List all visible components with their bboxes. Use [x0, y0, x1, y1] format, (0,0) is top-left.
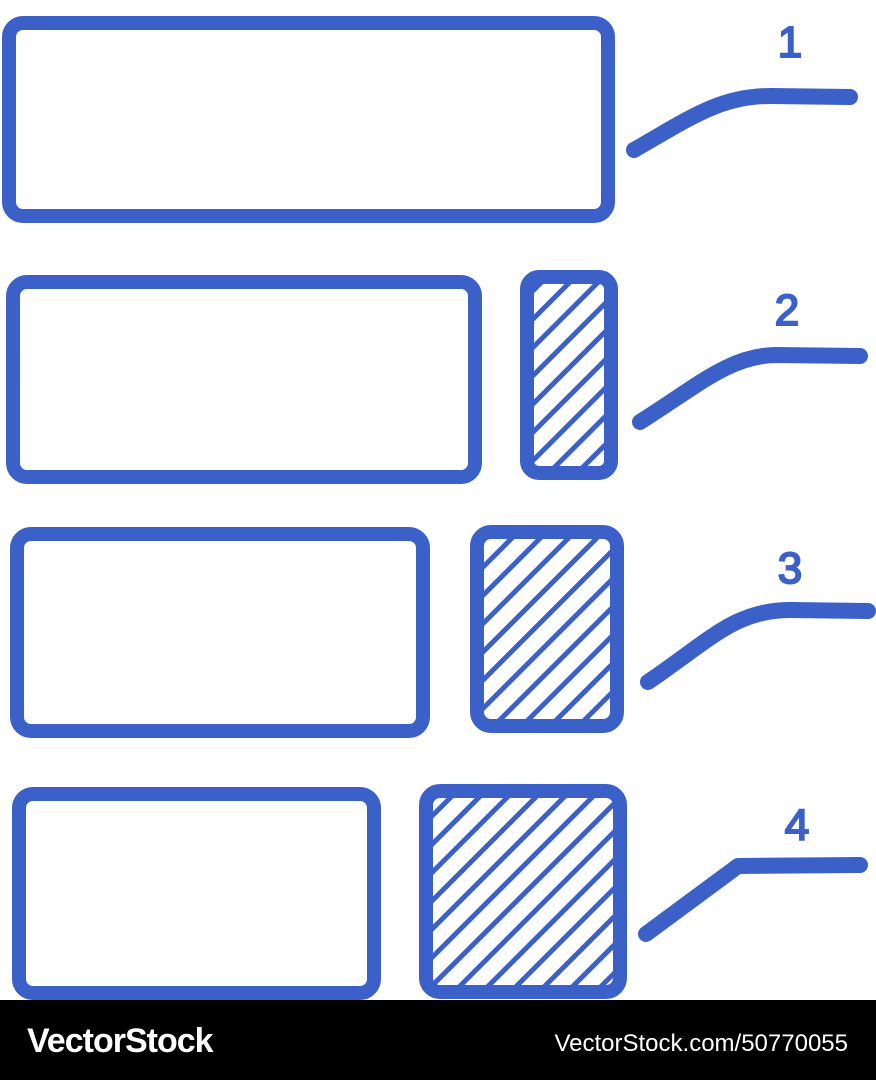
number 4: 4 — [785, 801, 809, 850]
pointer line 4 — [646, 865, 860, 934]
pointer line 3 — [648, 610, 868, 682]
footer brand: VectorStock — [27, 1022, 214, 1060]
box: row 3 — [17, 534, 423, 731]
number 1: 1 — [778, 18, 802, 67]
hatched box 2 — [527, 277, 611, 473]
footer bar — [0, 1000, 876, 1080]
box: row 1 — [9, 23, 608, 216]
box: row 4 — [19, 794, 374, 993]
pointer line 2 — [640, 355, 860, 422]
hatched box 4 — [426, 791, 620, 992]
pointer line 1 — [634, 96, 850, 150]
box: row 2 — [13, 282, 475, 477]
hatched box 3 — [477, 532, 617, 726]
number 3: 3 — [778, 544, 802, 593]
footer id: VectorStock.com/50770055 — [554, 1030, 848, 1057]
number 2: 2 — [775, 286, 799, 335]
